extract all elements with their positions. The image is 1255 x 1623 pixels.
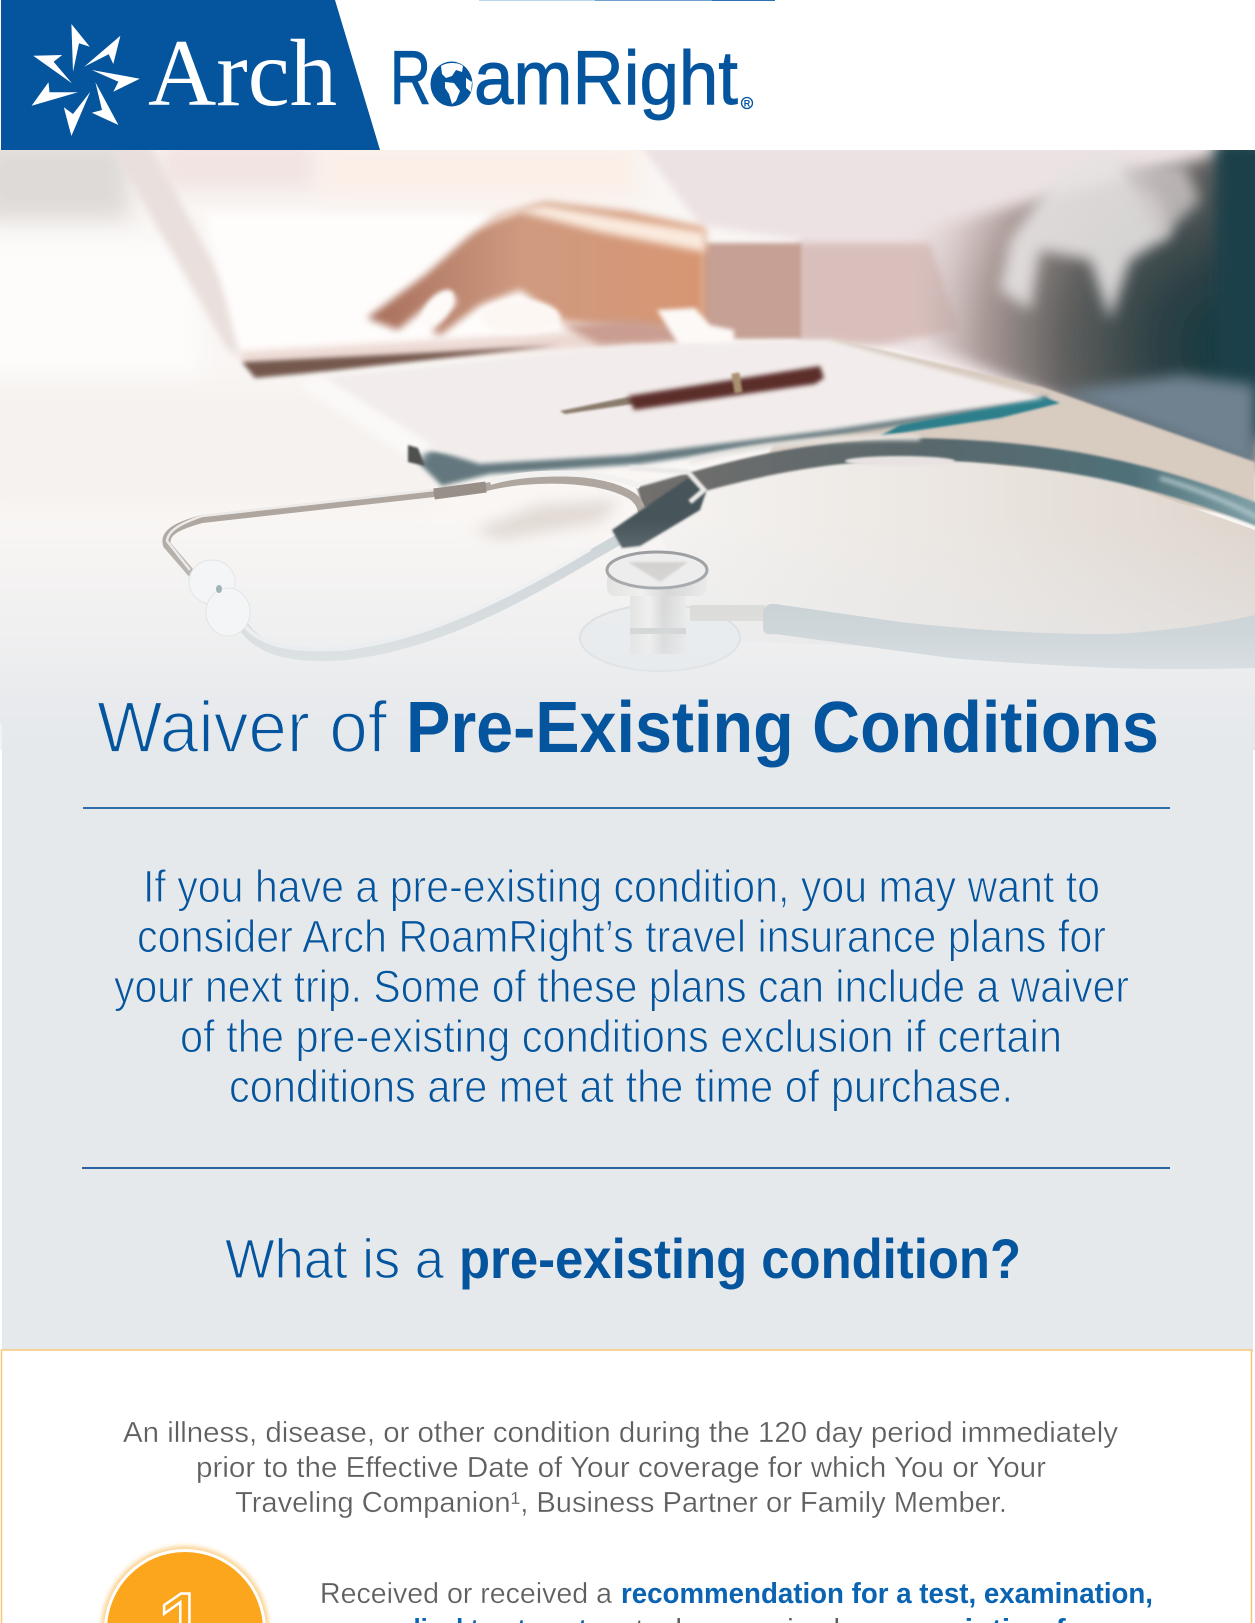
icon: globe — [430, 62, 472, 106]
photo: laptop, clipboard and stethoscope — [0, 140, 1255, 750]
fade to panel — [0, 520, 1255, 750]
title — [97, 688, 1159, 768]
item 1 text: recommendation for a test, examination, — [621, 1578, 1153, 1610]
Y-junction — [612, 478, 706, 548]
subheading: What is a — [225, 1227, 445, 1290]
intro paragraph: conditions are met at the time of purchase. — [229, 1061, 1013, 1112]
blue logo panel — [1, 0, 380, 150]
title: Pre-Existing Conditions — [406, 688, 1159, 768]
wordmark: RoamRight: R — [390, 36, 431, 121]
item 1 text — [320, 1578, 1153, 1623]
item 1 text: Received or received a — [320, 1578, 613, 1610]
laptop — [110, 145, 665, 378]
background blur tones — [0, 140, 640, 505]
intro paragraph: of the pre-existing conditions exclusion if certain — [180, 1011, 1062, 1062]
definition text: prior to the Effective Date of Your coverage for which You or Your — [196, 1452, 1046, 1484]
subheading: pre-existing condition? — [459, 1227, 1021, 1290]
intro paragraph: consider Arch RoamRight’s travel insurance plans for — [137, 911, 1106, 962]
icon: Arch star pinwheel — [32, 24, 140, 136]
divider bottom — [82, 1167, 1170, 1169]
registered mark — [742, 98, 752, 108]
stethoscope binaural metal — [166, 473, 642, 656]
definition text: Traveling Companion¹, Business Partner or Family Member. — [235, 1487, 1007, 1519]
intro paragraph — [114, 861, 1129, 1112]
divider top — [83, 807, 1170, 809]
header: logo bar — [0, 0, 1255, 150]
registered mark: R — [744, 98, 751, 108]
intro paragraph: your next trip. Some of these plans can include a waiver — [114, 961, 1129, 1012]
stethoscope shadow — [474, 500, 620, 540]
subheading — [225, 1227, 1021, 1290]
pen — [560, 366, 824, 414]
definition text — [123, 1417, 1119, 1519]
earbuds — [189, 560, 250, 636]
clipboard paper — [300, 340, 1060, 486]
number badge 1 — [101, 1546, 269, 1623]
shirt sleeve and torso — [640, 140, 1255, 470]
title: Waiver of — [97, 688, 388, 768]
wordmark: RoamRight: amRight — [474, 36, 738, 121]
lower tube — [763, 604, 1255, 669]
wordmark: RoamRight: o — [431, 36, 472, 121]
intro paragraph: If you have a pre-existing condition, you may want to — [143, 861, 1100, 912]
wooden table — [755, 342, 1255, 634]
definition text: An illness, disease, or other condition during the 120 day period immediately — [123, 1417, 1119, 1449]
stethoscope tube upper — [640, 438, 1255, 522]
top edge strip — [479, 0, 775, 1]
chestpiece — [580, 552, 765, 671]
panel: definition card — [2, 1350, 1252, 1623]
hand and cuff — [367, 202, 802, 347]
panel: grey background — [2, 750, 1253, 1352]
wordmark: Arch: Arch — [148, 20, 337, 126]
